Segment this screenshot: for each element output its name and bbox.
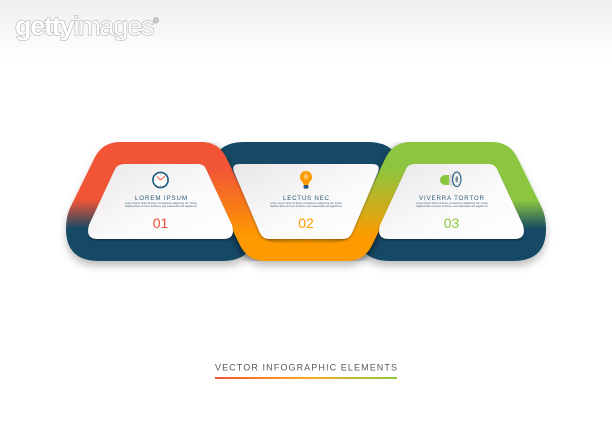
footer title: VECTOR INFOGRAPHIC ELEMENTS [215,363,397,373]
body text: Lorem ipsum dolor sit amet, consectetur adipiscing elit. Fusce [125,201,197,205]
heading: viverra tortor: VIVERRA TORTOR [419,195,485,202]
card 1 [88,164,233,239]
ribbon: green to orange link [306,142,410,261]
watermark logo: gettyimages [15,11,153,41]
number 02: 02 [298,215,314,231]
body text: dapibus diam vel sem tincidunt, sed malesuada nisl sagittis leo [270,204,342,208]
body text: dapibus diam vel sem tincidunt, sed malesuada nisl sagittis leo [125,204,197,208]
watermark logo: ® [153,17,159,25]
ribbon: red to orange link [202,142,306,261]
body text: dapibus diam vel sem tincidunt, sed malesuada nisl sagittis leo [416,204,488,208]
heading: lorem ipsum: LOREM IPSUM [135,195,187,202]
footer gradient rule [215,377,397,379]
background [0,0,612,60]
card 2 [233,164,379,239]
shape: step 1 ring [66,142,255,261]
icon: light bulb [300,171,312,189]
panel: connected hexagon chain [66,142,546,261]
panel: step 3 card [379,164,524,239]
heading: lectus nec: LECTUS NEC [283,195,330,202]
body text: Lorem ipsum dolor sit amet, consectetur adipiscing elit. Fusce [270,201,342,205]
body text [125,201,197,208]
panel: step 2 card [233,164,379,239]
card 3 [379,164,524,239]
ribbon: orange base [270,243,342,261]
shape: step 2 ring [212,142,400,261]
number 03: 03 [444,215,459,231]
icon: megaphone [440,172,461,187]
panel: step 1 card [88,164,233,239]
body text: Lorem ipsum dolor sit amet, consectetur adipiscing elit. Fusce [416,201,488,205]
body text [270,201,342,208]
body text [416,201,488,208]
icon: clock [153,172,168,188]
number 01: 01 [153,215,168,231]
shape: step 3 ring [357,142,546,261]
